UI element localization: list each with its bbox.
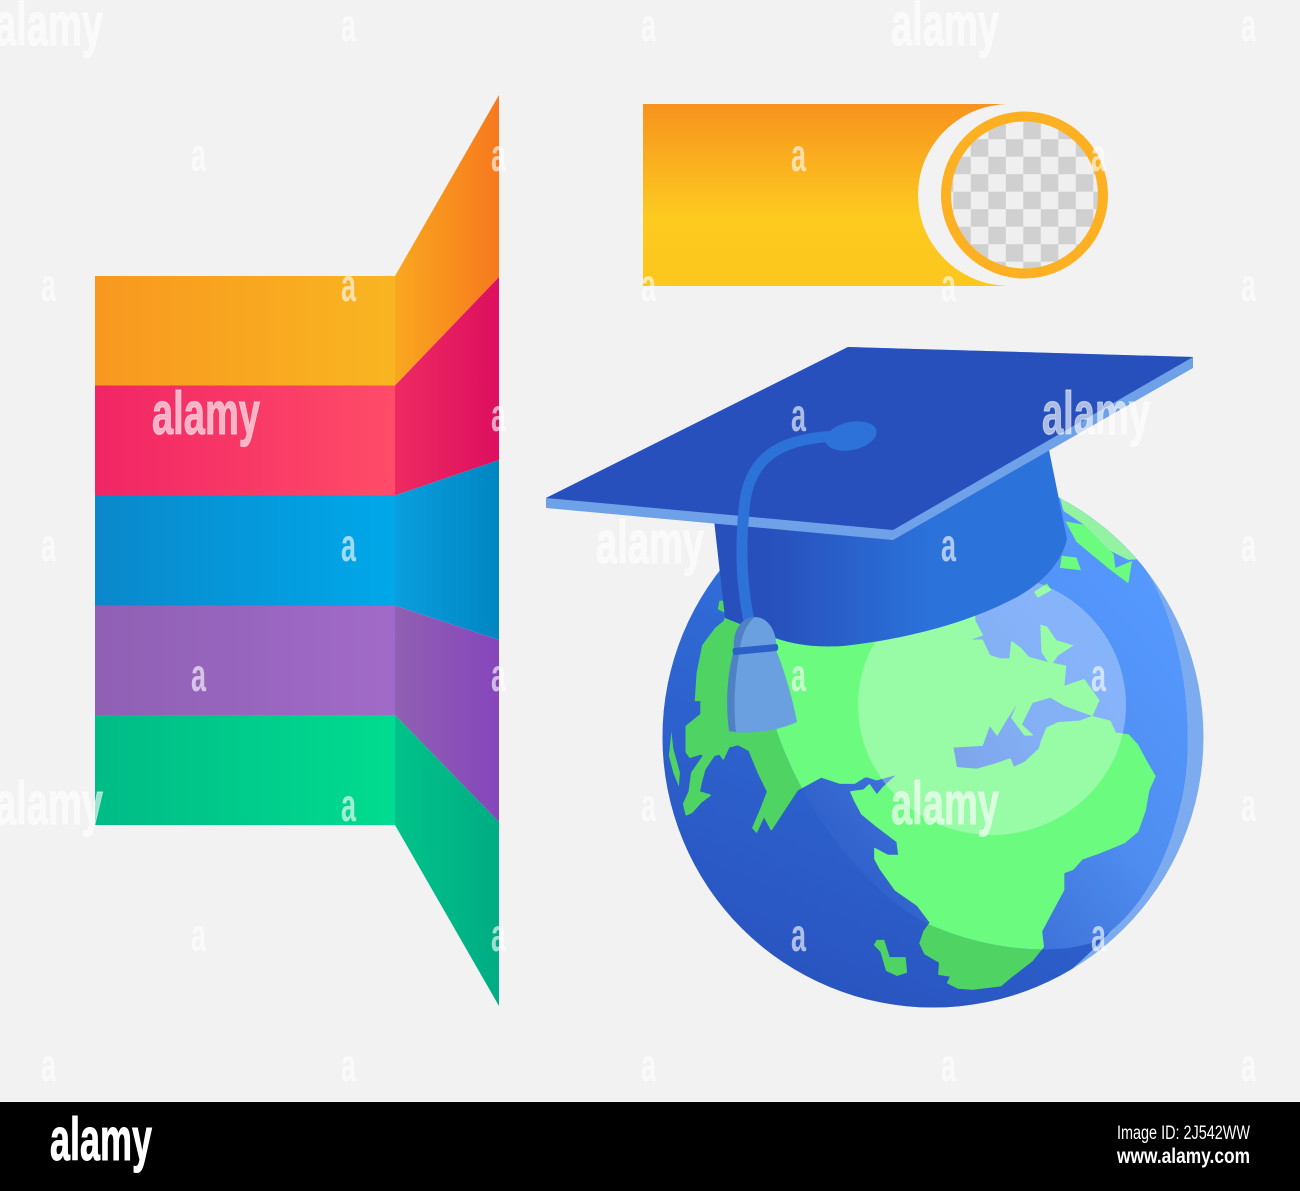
watermark letters: a: [791, 389, 806, 441]
image id: Image ID: 2J542WW: [1117, 1123, 1250, 1144]
watermark letters: a: [341, 779, 356, 831]
stripe: orange: [95, 95, 499, 386]
banner circular cut-out: [918, 104, 1102, 286]
globe rim: [662, 466, 1204, 1008]
watermark wordmarks: alamy: [152, 380, 260, 447]
land in shadow: [668, 600, 1042, 990]
watermark letters: a: [1091, 129, 1106, 181]
watermark letters: a: [791, 649, 806, 701]
northern land near rim: [1060, 498, 1137, 584]
watermark letters: a: [1241, 519, 1256, 571]
mortarboard edge: [546, 347, 1193, 540]
panel: orange banner with transparent circle: [643, 104, 1103, 286]
watermark letters: a: [1091, 909, 1106, 961]
watermark letters: a: [341, 259, 356, 311]
watermark letters: a: [191, 129, 206, 181]
watermark letters: a: [641, 779, 656, 831]
watermark wordmarks: alamy: [0, 770, 103, 837]
watermark letters: a: [791, 129, 806, 181]
watermark wordmarks: alamy: [891, 770, 999, 837]
watermark letters: a: [491, 129, 506, 181]
mortarboard top: [546, 347, 1193, 530]
watermark letters: a: [491, 389, 506, 441]
watermark letters: a: [641, 259, 656, 311]
land in light: [776, 556, 1156, 950]
stripe: blue: [95, 460, 499, 640]
globe shaded body: [662, 498, 1188, 1008]
graduation cap: [546, 347, 1193, 733]
watermark letters: a: [491, 909, 506, 961]
watermark wordmarks: alamy: [1042, 380, 1150, 447]
website: www.alamy.com: [1116, 1145, 1250, 1168]
watermark letters: a: [491, 649, 506, 701]
stripe: green: [95, 715, 499, 1006]
watermark letters: a: [1241, 0, 1256, 51]
watermark letters: a: [641, 0, 656, 51]
illustration: globe with graduation cap: [546, 347, 1204, 1031]
watermark letters: a: [341, 519, 356, 571]
tassel: [727, 617, 797, 733]
watermark letters: a: [341, 1039, 356, 1091]
watermark letters: a: [791, 909, 806, 961]
watermark letters: a: [1091, 649, 1106, 701]
cap base: [714, 445, 1067, 646]
watermark letters: a: [191, 909, 206, 961]
stripe: pink: [95, 277, 499, 496]
stripe: purple: [95, 606, 499, 822]
watermark letters: a: [641, 1039, 656, 1091]
watermark letters: a: [341, 0, 356, 51]
watermark letters: a: [41, 519, 56, 571]
tassel cord and button: [742, 417, 879, 625]
checkerboard circle with orange ring: [946, 116, 1103, 274]
banner bar: [643, 104, 1005, 286]
globe lit hemisphere: [770, 466, 1188, 949]
watermark letters: a: [1241, 779, 1256, 831]
watermark letters: a: [941, 259, 956, 311]
watermark letters: a: [41, 259, 56, 311]
panel: folded rainbow stripes: [95, 95, 499, 1006]
footer bar: [0, 1102, 1300, 1191]
watermark letters: a: [1241, 1039, 1256, 1091]
watermark letters: a: [191, 649, 206, 701]
watermark wordmarks: [0, 0, 1150, 837]
watermark letters: a: [1241, 259, 1256, 311]
watermark letters: a: [941, 1039, 956, 1091]
globe: [662, 498, 1204, 1008]
watermark letters: a: [941, 519, 956, 571]
footer logo: alamy: [50, 1106, 152, 1173]
highlight disc: [858, 575, 1126, 835]
watermark letters: a: [41, 1039, 56, 1091]
watermark wordmarks: alamy: [596, 509, 704, 576]
